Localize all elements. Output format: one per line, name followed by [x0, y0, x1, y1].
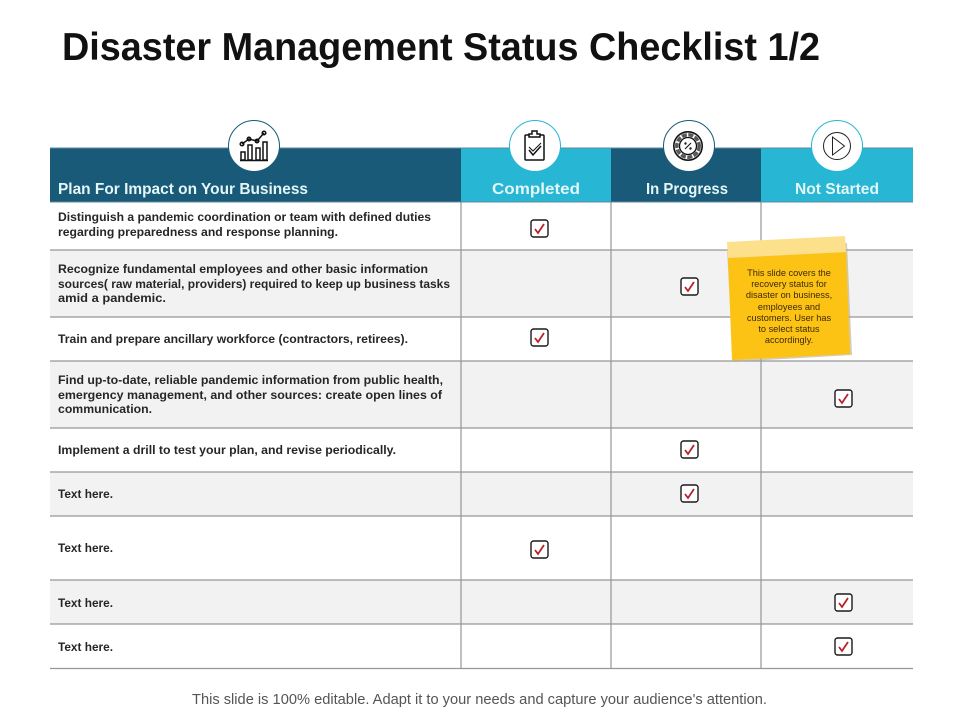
sticky note text: employees and [758, 302, 820, 312]
header: plan: Plan For Impact on Your Business [58, 181, 308, 198]
check: row 6 in progress [681, 485, 698, 502]
row 2 text: Recognize fundamental employees and other basic information [58, 263, 428, 276]
checkmarks [531, 220, 852, 655]
row 3 text: Train and prepare ancillary workforce (contractors, retirees). [58, 333, 408, 346]
row 6 text: Text here. [58, 488, 113, 501]
sticky note callout [727, 236, 852, 362]
icon: bar and line chart [228, 120, 280, 172]
row 8 text: Text here. [58, 597, 113, 610]
row 1 text: regarding preparedness and response planning. [58, 226, 338, 239]
title: Disaster Management Status Checklist 1/2 [62, 26, 820, 69]
sticky note text: recovery status for [751, 279, 827, 289]
row 2 text: amid a pandemic. [58, 292, 166, 305]
sticky note text: customers. User has [747, 313, 832, 323]
row 1 text [58, 211, 431, 239]
header: in progress [611, 148, 761, 202]
table [50, 120, 913, 668]
row 4 text [58, 374, 443, 416]
check: row 8 not started [835, 594, 852, 611]
check: row 7 completed [531, 541, 548, 558]
row 4 text: Find up-to-date, reliable pandemic information from public health, [58, 374, 443, 387]
header: not started [761, 148, 913, 202]
check: row 5 in progress [681, 441, 698, 458]
sticky note text: disaster on business, [746, 290, 832, 300]
row 4 text: emergency management, and other sources: create open lines of [58, 389, 442, 402]
table row backgrounds [50, 250, 913, 624]
sticky note text [746, 268, 832, 345]
row 7 text: Text here. [58, 542, 113, 555]
check: row 1 completed [531, 220, 548, 237]
footer note: This slide is 100% editable. Adapt it to your needs and capture your audience's attention. [192, 692, 767, 708]
icon: percent dial [664, 120, 714, 172]
header: completed: Completed [492, 181, 580, 198]
sticky note text: accordingly. [765, 335, 813, 345]
check: row 2 in progress [681, 278, 698, 295]
icon: play button [812, 120, 862, 172]
header row [50, 148, 913, 202]
sticky note text: This slide covers the [747, 268, 831, 278]
header: completed [461, 148, 611, 202]
row 2 text: sources( raw material, providers) required to keep up business tasks [58, 278, 450, 291]
header: in progress: In Progress [646, 181, 728, 198]
row labels [58, 211, 450, 654]
row 4 text: communication. [58, 403, 152, 416]
row 1 text: Distinguish a pandemic coordination or team with defined duties [58, 211, 431, 224]
row 2 text [58, 263, 450, 305]
icon: clipboard [510, 120, 560, 172]
row 9 text: Text here. [58, 641, 113, 654]
check: row 3 completed [531, 329, 548, 346]
check: row 4 not started [835, 390, 852, 407]
header: not started: Not Started [795, 181, 879, 198]
sticky note text: to select status [758, 324, 820, 334]
row 5 text: Implement a drill to test your plan, and revise periodically. [58, 444, 396, 457]
check: row 9 not started [835, 638, 852, 655]
header: plan [50, 148, 461, 202]
